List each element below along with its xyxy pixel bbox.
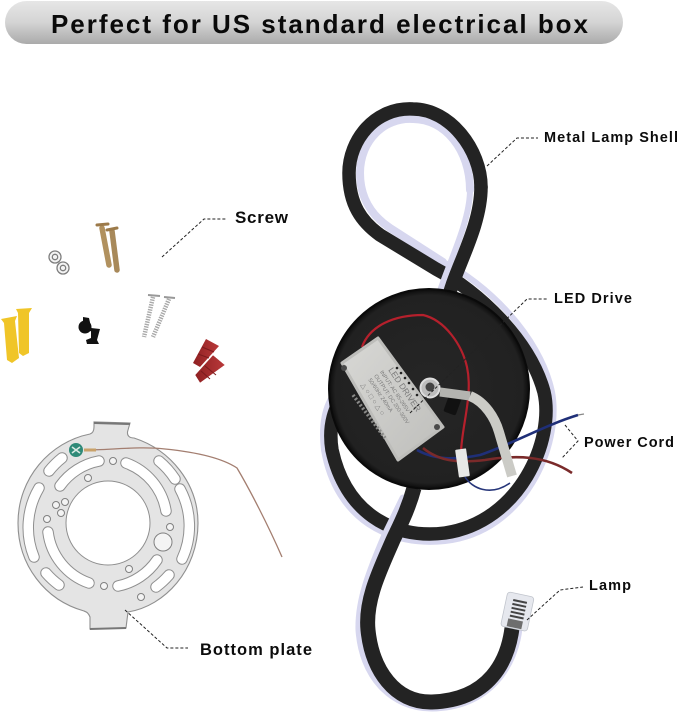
title text: Perfect for US standard electrical box: [51, 9, 589, 39]
callout: bottom plate: [125, 610, 312, 659]
icon: cable grommet: [420, 378, 440, 398]
callout: power cord: [562, 425, 674, 458]
driver label text: LED DRIVER: [386, 366, 423, 413]
callout: LED drive: LED Drive: [554, 291, 632, 307]
grey power cable: [440, 392, 470, 396]
callout: metal lamp shell: [487, 130, 678, 166]
icon: small rivet holes: [44, 458, 174, 600]
icon: white self-tapping screws: [144, 295, 175, 337]
driver label text: OUTPUT: DC 200-300V: [372, 374, 410, 426]
lamp diffuser: stem: [359, 190, 519, 708]
icon: black screws: [78, 317, 100, 344]
icon: mounting ears: [341, 365, 347, 371]
icon: yellow wall anchors: [1, 308, 32, 363]
icon: hex nuts: [49, 251, 69, 274]
vent dots: [396, 367, 418, 396]
icon: tab edges: [90, 423, 130, 629]
callout: lamp: Lamp: [589, 578, 631, 594]
metal shell: upper stem: [450, 187, 481, 292]
panel: screws and small hardware: [1, 224, 225, 383]
callout: lamp: [527, 578, 631, 620]
icon: plate slots: [28, 458, 189, 587]
icon: red wire connectors: [193, 339, 225, 383]
driver label text: △ ○ □ ○ △ ○: [359, 382, 386, 417]
icon: strain-relief block: [443, 389, 464, 416]
callout: LED drive: [410, 291, 632, 413]
panel: bottom plate: [18, 422, 282, 629]
mounting disc: [329, 289, 529, 489]
icon: plate body: [18, 422, 198, 629]
icon: ground wire: [85, 448, 282, 557]
wire: brown lead: [423, 448, 572, 473]
driver label text: 50/60Hz 240mA: [366, 378, 394, 414]
callout: screw: [162, 208, 289, 257]
callout: screw: Screw: [235, 208, 289, 227]
wire: blue lead: [417, 415, 578, 458]
callout: bottom plate: Bottom plate: [200, 641, 312, 659]
icon: white wire connector: [455, 448, 470, 478]
icon: green ground screw: [69, 443, 83, 457]
metal shell: loop and spiral: [331, 109, 546, 534]
callout: power cord: Power Cord: [584, 435, 674, 451]
icon: lamp end cap: [501, 592, 534, 632]
driver label text: [359, 363, 426, 435]
vent teeth: [353, 395, 385, 438]
lamp diffuser: loop and spiral: [323, 119, 554, 542]
callout: metal lamp shell: Metal Lamp Shell: [544, 130, 678, 146]
title banner: [5, 1, 623, 44]
icon: centre hole: [66, 481, 150, 565]
wire: blue loop: [465, 477, 510, 490]
metal shell: lower stem and hook: [368, 488, 512, 702]
panel: treble-clef lamp: [323, 109, 584, 708]
icon: brass screws: [97, 224, 117, 270]
LED driver box: [341, 338, 443, 460]
wire: red: [362, 315, 469, 452]
driver label text: INPUT: AC 85-265V: [378, 370, 410, 414]
